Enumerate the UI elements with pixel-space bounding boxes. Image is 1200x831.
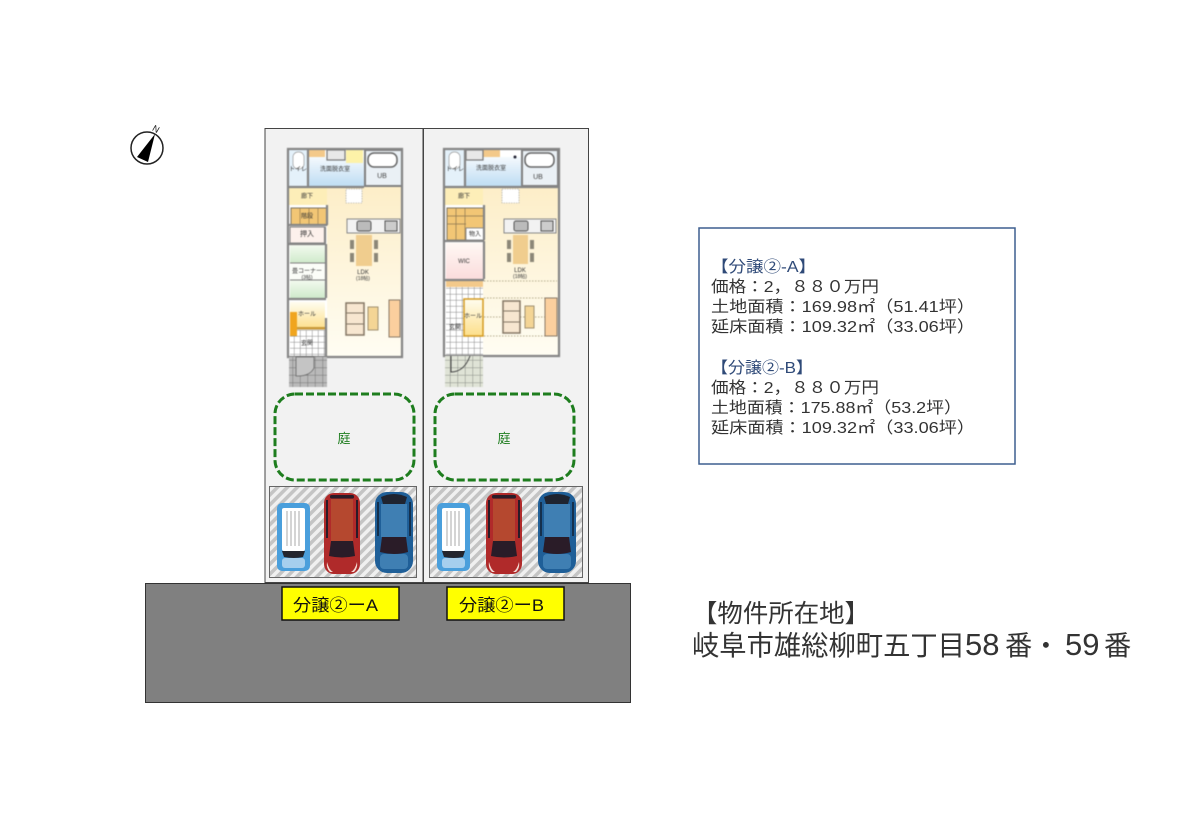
stairs A (291, 208, 327, 225)
road (146, 584, 630, 702)
bath A (365, 150, 402, 186)
car: red A (324, 493, 360, 574)
car: white van B (437, 503, 470, 571)
lot A (265, 128, 423, 582)
LDK label B (513, 268, 527, 280)
LDK label A (356, 270, 370, 282)
corridor B (445, 187, 483, 205)
tv board B (545, 298, 557, 336)
lot A details (711, 258, 975, 336)
washroom B (465, 150, 521, 187)
garden A (275, 394, 414, 480)
lot A details: 土地面積：169.98㎡（51.41坪） (711, 298, 975, 316)
toilet A (289, 150, 308, 188)
entrance porch B (445, 356, 483, 387)
walk-in closet B: WIC (458, 259, 470, 265)
tv board A (389, 300, 400, 337)
info panel (699, 228, 1015, 464)
label: lot A: 分譲②ーA (293, 596, 379, 615)
hallway label B: 廊下 (458, 192, 470, 200)
washroom A (308, 150, 364, 187)
lot B details (711, 359, 975, 437)
parking A (270, 486, 416, 578)
label: lot B: 分譲②ーB (459, 596, 544, 615)
storage A (290, 227, 325, 243)
storage A: 押入 (300, 229, 314, 238)
kitchen B (504, 219, 556, 233)
garden B (435, 394, 574, 480)
entry label B: 玄関 (449, 323, 461, 331)
car: blue A (375, 492, 413, 573)
walls B (444, 149, 559, 356)
entrance porch A (289, 357, 327, 387)
LDK label A: LDK (357, 270, 369, 276)
lot B details: 【分譲②-B】 (711, 359, 813, 377)
bath B (522, 150, 558, 186)
property location: 58 (965, 627, 999, 662)
car: white van A (277, 503, 310, 571)
hallway label A: 廊下 (301, 192, 313, 200)
toilet B: トイレ (446, 167, 464, 173)
dining set B (507, 235, 534, 264)
compass: north marker: N (151, 123, 161, 135)
sofa A (346, 303, 364, 335)
dining set A (350, 235, 378, 266)
label: lot A (282, 587, 399, 620)
garden B: 庭 (497, 431, 511, 446)
void mark B (502, 189, 519, 203)
lot A details: 延床面積：109.32㎡（33.06坪） (711, 318, 975, 336)
LDK label B: LDK (514, 268, 526, 274)
car: blue B (538, 492, 576, 573)
hall A: ホール (298, 311, 316, 318)
bath A: UB (377, 173, 387, 180)
stairs B: 物入 (469, 230, 481, 238)
garden A: 庭 (337, 431, 351, 446)
void mark A (346, 189, 362, 203)
lot A details: 【分譲②-A】 (711, 258, 816, 276)
hall A (290, 302, 325, 336)
hall B: ホール (464, 313, 482, 320)
dotted lines B (484, 281, 557, 336)
low table B (525, 306, 534, 328)
lot B details: 土地面積：175.88㎡（53.2坪） (711, 399, 962, 417)
lot B (424, 128, 588, 582)
lot B details: 延床面積：109.32㎡（33.06坪） (711, 419, 975, 437)
walk-in closet B (446, 243, 483, 279)
property location: 岐阜市雄総柳町五丁目 (692, 630, 965, 661)
property location: 番・ (1005, 630, 1060, 661)
washroom B: 洗面脱衣室 (476, 164, 506, 172)
entry tile A: 玄関 (301, 339, 313, 347)
tatami corner A: 畳コーナー (292, 268, 322, 275)
property location: 59 (1065, 627, 1099, 662)
sofa B (503, 301, 520, 333)
parking B (430, 486, 582, 578)
LDK label B: (18帖) (513, 273, 527, 280)
stairs B (447, 208, 484, 240)
tatami corner A: (3帖) (301, 274, 313, 281)
toilet B (445, 150, 464, 187)
stairs A: 階段 (301, 212, 313, 220)
LDK label A: (18帖) (356, 275, 370, 282)
bath B: UB (533, 174, 543, 181)
hall B (464, 299, 483, 336)
property location (692, 600, 1131, 662)
toilet A: トイレ (289, 167, 307, 173)
tatami corner A (290, 245, 325, 298)
floor plan B (444, 149, 559, 356)
compass: north marker (131, 123, 163, 164)
property location: 番 (1104, 630, 1131, 661)
LDK room A (327, 187, 401, 356)
corridor A (289, 187, 327, 205)
floor plan A (288, 149, 402, 357)
car: red B (486, 493, 522, 574)
entry tile A (290, 330, 325, 357)
kitchen A (347, 219, 400, 233)
low table A (368, 307, 378, 330)
lot B details: 価格：2，８８０万円 (711, 379, 879, 397)
shoe storage B (446, 281, 483, 356)
LDK room B (483, 187, 558, 356)
label: lot B (447, 587, 564, 620)
walls A (288, 149, 402, 357)
property location: 【物件所在地】 (692, 600, 870, 628)
lot A details: 価格：2，８８０万円 (711, 278, 879, 296)
washroom A: 洗面脱衣室 (320, 165, 350, 173)
